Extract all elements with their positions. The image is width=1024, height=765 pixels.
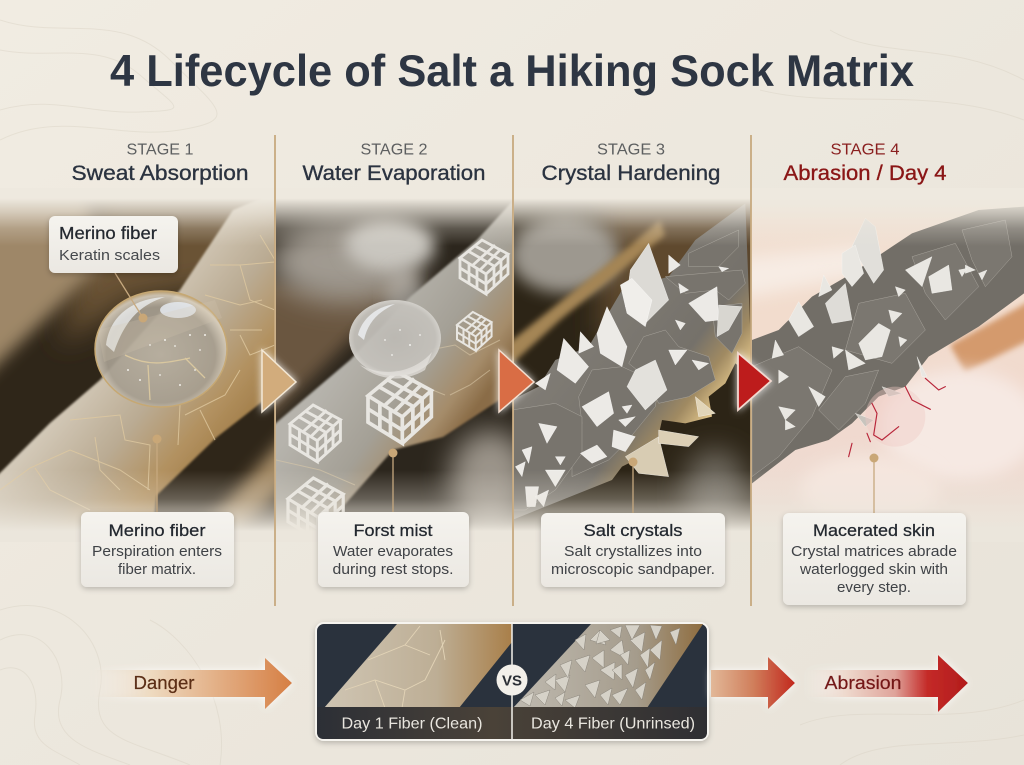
arrow: danger: Danger: [134, 673, 194, 693]
callout: stage 1 merino fiber: Perspiration enters: [92, 543, 222, 560]
callout: stage 2 forst mist: Forst mist: [354, 521, 433, 540]
panel: stage 1 merino fiber image: [0, 200, 274, 530]
icon: salt lattice cubes: [288, 240, 508, 540]
fiber with plates: [512, 203, 752, 520]
arrow: stage 1 to 2: [262, 350, 296, 412]
callout: merino fiber keratin scales: Keratin scales: [59, 247, 160, 264]
arrow: stage 3 to 4: [738, 353, 771, 410]
leader: stage 4: [870, 454, 878, 514]
arrow: abrasion: [806, 655, 968, 712]
icon: abrasion wounds: [849, 378, 945, 457]
stage 2 heading: Water Evaporation: [302, 161, 486, 185]
day 1 clean fiber image: [324, 624, 512, 708]
icon: salt crystals on skin: [772, 218, 987, 430]
leader: stage 1: [152, 434, 162, 514]
callout: merino fiber keratin scales: Merino fiber: [59, 223, 157, 243]
stage 1 heading: [72, 142, 249, 185]
icon: salt crystals: [515, 243, 742, 507]
stage 1 heading: STAGE 1: [126, 142, 194, 158]
callout: stage 2 forst mist: during rest stops.: [332, 561, 454, 578]
callout: stage 4 macerated skin: Crystal matrices abrade: [791, 543, 957, 560]
stage 4 heading: [784, 142, 947, 185]
stage 2 heading: [302, 142, 486, 185]
icon: water droplet: [95, 291, 227, 407]
vs badge: [496, 664, 528, 696]
panel: stage 2 evaporation image: [276, 200, 512, 529]
title: 4 Lifecycle of Salt a Hiking Sock Matrix: [110, 47, 914, 96]
panel: stage 3 crystal image: [514, 200, 750, 530]
callout: stage 1 merino fiber: fiber matrix.: [118, 561, 196, 578]
callout: stage 3 salt crystals: [541, 513, 725, 587]
stage 4 heading: Abrasion / Day 4: [784, 161, 947, 185]
callout: stage 2 forst mist: Water evaporates: [333, 543, 453, 560]
callout: stage 3 salt crystals: Salt crystallizes into: [564, 543, 702, 560]
callout: stage 3 salt crystals: microscopic sandpaper.: [551, 561, 715, 578]
vs badge: VS: [502, 672, 522, 690]
callout: merino fiber keratin scales: [49, 216, 178, 273]
callout: stage 4 macerated skin: every step.: [837, 579, 911, 596]
arrow: danger: [90, 658, 292, 709]
stage 3 heading: [542, 142, 720, 185]
callout: stage 4 macerated skin: waterlogged skin with: [799, 561, 948, 578]
callout: stage 2 forst mist: [318, 512, 469, 587]
arrow: comparison to abrasion: [711, 657, 795, 709]
icon: shrinking droplet: [349, 300, 441, 378]
image band fade bottom: [0, 470, 1024, 542]
callout: stage 1 merino fiber: Merino fiber: [108, 521, 206, 540]
stage 3 heading: Crystal Hardening: [542, 161, 720, 185]
caption: day 1: Day 1 Fiber (Clean): [342, 716, 482, 732]
stage 4 heading: STAGE 4: [830, 142, 900, 158]
arrow: abrasion: Abrasion: [824, 673, 902, 693]
callout: stage 1 merino fiber: [81, 512, 234, 587]
caption: day 4: Day 4 Fiber (Unrinsed): [531, 716, 695, 732]
divider: [511, 623, 513, 740]
panel: stage 4 skin image: [752, 206, 1024, 496]
callout: stage 3 salt crystals: Salt crystals: [584, 521, 682, 540]
caption strip: [317, 707, 707, 739]
stage 1 heading: Sweat Absorption: [72, 161, 249, 185]
stage dividers: [275, 135, 751, 606]
image band fade top: [0, 188, 1024, 246]
leader: stage 2: [388, 448, 398, 514]
stage 3 heading: STAGE 3: [597, 142, 665, 158]
arrow: stage 2 to 3: [499, 350, 534, 412]
callout: stage 4 macerated skin: Macerated skin: [813, 521, 935, 540]
fiber: [0, 190, 280, 545]
comparison panel: day 1 vs day 4: [316, 623, 708, 740]
stage 2 heading: STAGE 2: [360, 142, 428, 158]
leader: keratin callout to droplet: [115, 273, 148, 322]
leader: stage 3: [628, 458, 638, 514]
callout: stage 4 macerated skin: [783, 513, 966, 605]
fiber: [276, 202, 512, 528]
day 4 unrinsed fiber image: [513, 624, 703, 708]
fiber with plates: [752, 207, 1024, 483]
